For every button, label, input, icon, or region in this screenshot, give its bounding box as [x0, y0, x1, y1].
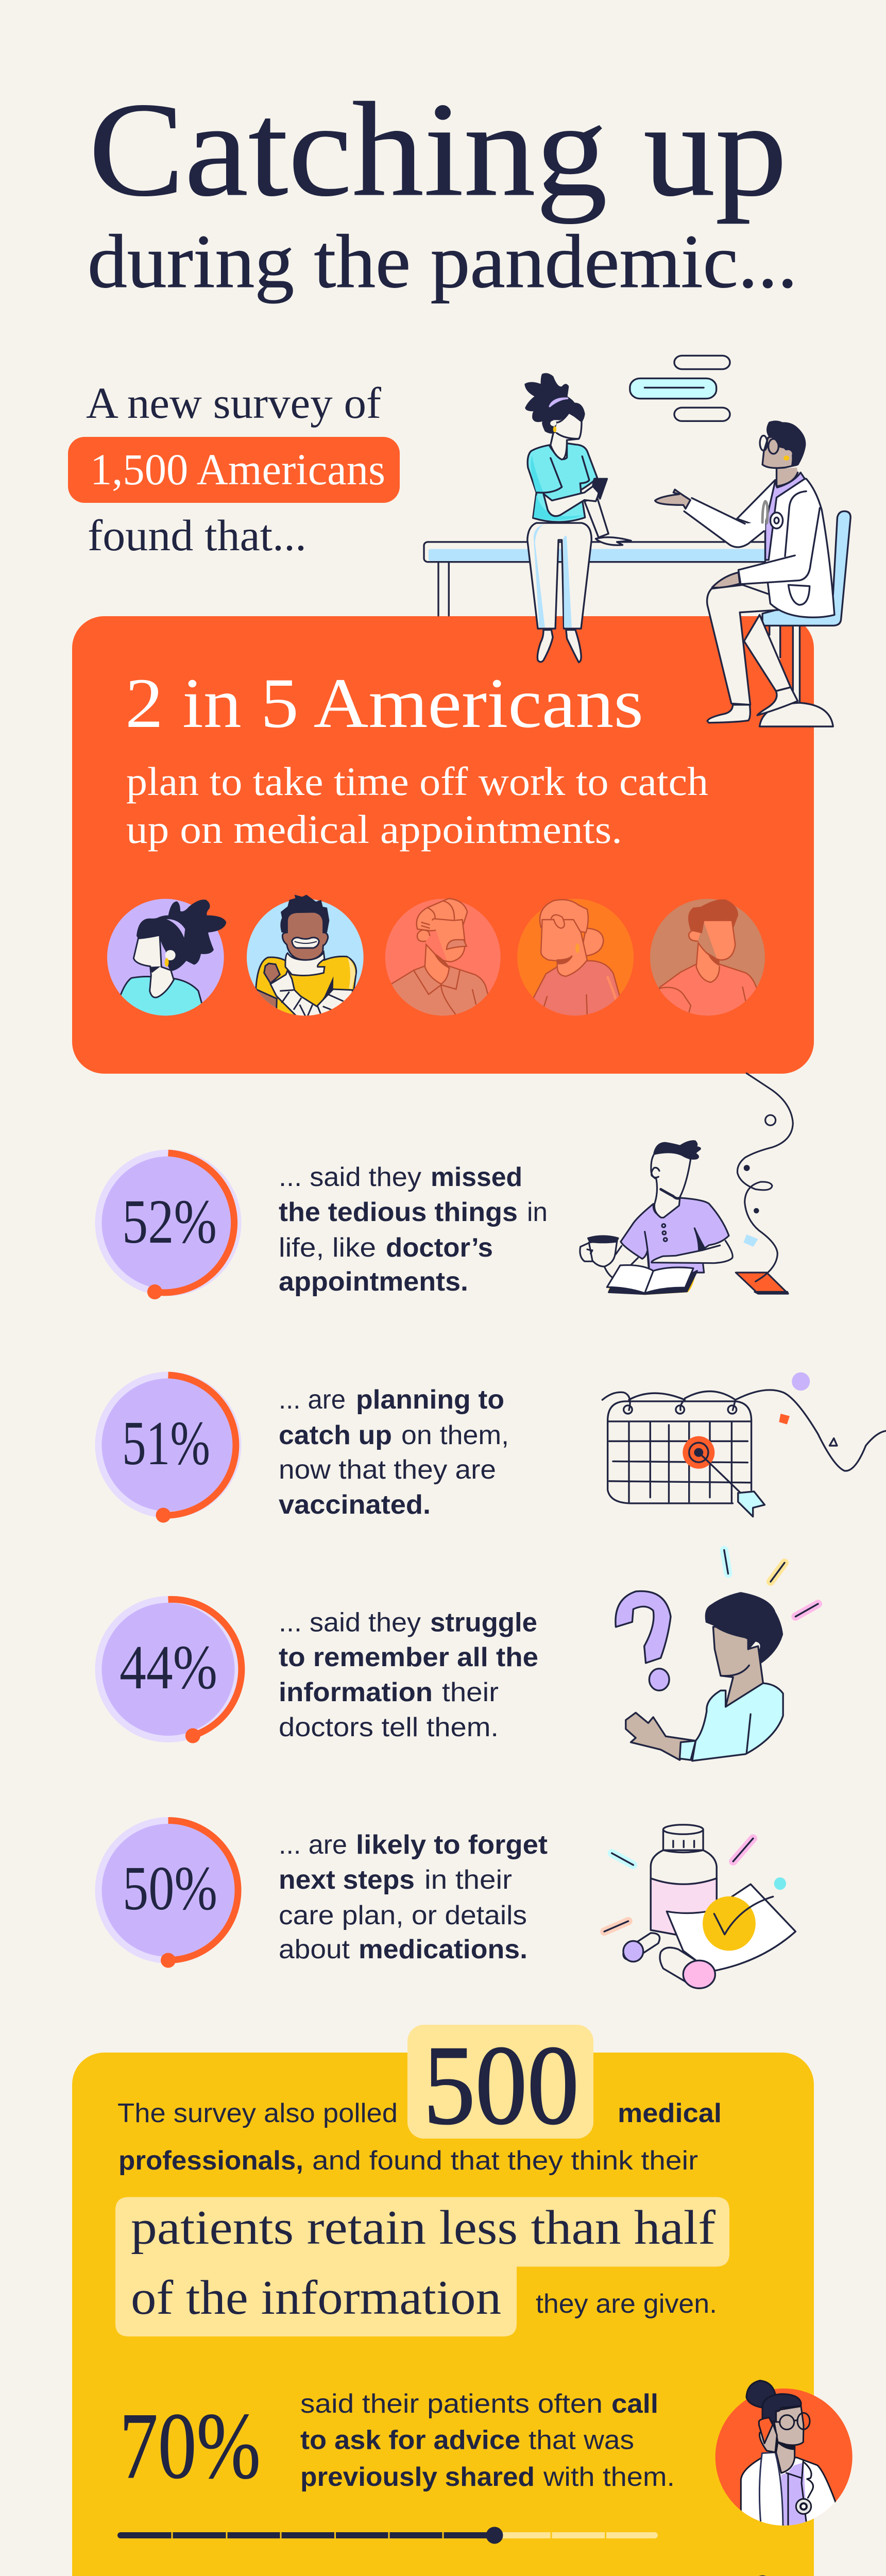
- floating dots: [743, 1115, 776, 1247]
- highlighted pill: 1,500 Americans: 1,500 Americans: [90, 445, 385, 494]
- intro text: [117, 2098, 722, 2319]
- doctor head: [760, 421, 805, 486]
- illustration: man reading with coffee and squiggle line: [580, 1073, 793, 1295]
- panel text: up on medical appointments.: [126, 807, 622, 852]
- doctor lower arm: [712, 508, 820, 588]
- description: missed: [431, 1162, 522, 1192]
- title: Catching up: [89, 75, 787, 224]
- title: [88, 75, 797, 304]
- portrait: injured man with neck brace: [247, 895, 364, 1024]
- donut: 50%: [123, 1854, 217, 1923]
- portrait: doctor on phone: [715, 2381, 853, 2531]
- squiggle: [738, 1073, 793, 1281]
- portrait: faded man with dark hair: [650, 899, 765, 1024]
- sparks: [724, 1550, 818, 1617]
- stat 70%: call: [611, 2389, 658, 2419]
- stat 52%: [95, 1150, 548, 1299]
- intro text: A new survey of: [86, 378, 381, 428]
- description: ... said they: [279, 1607, 421, 1637]
- highlight: 500: 500: [423, 2022, 579, 2148]
- stat 70%: 70%: [120, 2393, 261, 2498]
- doctor chair: [760, 511, 850, 726]
- patient arm and phone: [543, 479, 607, 516]
- intro text: found that...: [88, 511, 306, 560]
- stat 51%: [95, 1371, 509, 1523]
- panel: 2 in 5 Americans: [72, 616, 814, 1074]
- target: [683, 1436, 714, 1469]
- description: ... are: [279, 1830, 347, 1860]
- confetti: [779, 1372, 837, 1446]
- tablet: [736, 1273, 788, 1294]
- stethoscope: [762, 501, 783, 529]
- description: ... said they: [279, 1162, 421, 1192]
- stat 70%: said their patients often: [300, 2389, 603, 2419]
- binder loops and trailing line: [602, 1390, 886, 1471]
- description: about: [279, 1935, 350, 1964]
- patient trousers: [527, 523, 591, 663]
- intro text: medical: [618, 2098, 722, 2128]
- doctor front leg: [707, 585, 779, 723]
- highlight: patients retain less than half of the information: [115, 2197, 729, 2336]
- description: [279, 1162, 548, 1297]
- illustration: patient and doctor talking at exam table: [424, 355, 850, 726]
- donut: 52%: [122, 1187, 217, 1257]
- sparks around medication: [604, 1838, 786, 1931]
- slider 70%: [117, 2527, 658, 2544]
- description: in their: [424, 1865, 512, 1895]
- description: appointments.: [279, 1267, 468, 1297]
- description: planning to: [356, 1385, 504, 1415]
- stat 50%: [95, 1817, 548, 1968]
- highlight: patients retain less than half of the information: of the information: [131, 2271, 501, 2325]
- donut: [95, 1596, 242, 1743]
- intro text: they are given.: [536, 2289, 717, 2319]
- description: likely to forget: [356, 1830, 548, 1860]
- shirt: [621, 1198, 729, 1273]
- description: ... are: [279, 1385, 346, 1415]
- pills: [623, 1933, 715, 1988]
- donut: [95, 1150, 241, 1299]
- bottle: [651, 1825, 717, 1936]
- doctor raised arm: [655, 489, 765, 547]
- intro text: and found that they think their: [312, 2146, 698, 2176]
- arm: [652, 1241, 732, 1263]
- patient shirt: [527, 443, 597, 522]
- portrait: patient with phone: [759, 2575, 766, 2576]
- description: next steps: [279, 1865, 415, 1895]
- description: doctors tell them.: [279, 1713, 499, 1742]
- checklist paper: [667, 1884, 795, 1972]
- doctor back leg: [744, 615, 798, 715]
- head: [651, 1153, 691, 1217]
- description: the tedious things: [279, 1197, 518, 1227]
- description: in: [527, 1197, 548, 1227]
- highlighted pill: 1,500 Americans: [68, 437, 400, 503]
- illustrations: confused person and medication: [604, 1550, 818, 1988]
- exam table: [424, 542, 769, 616]
- stat 70%: with them.: [543, 2462, 675, 2492]
- description: medications.: [359, 1935, 527, 1964]
- stat 70%: previously shared: [300, 2462, 535, 2492]
- donut: [95, 1817, 241, 1968]
- doctor coat: [737, 472, 834, 617]
- question mark: [616, 1591, 671, 1690]
- intro text: [68, 378, 400, 560]
- stat 70%: [120, 2389, 675, 2498]
- speech bubbles: [630, 355, 730, 421]
- donut: [95, 1371, 241, 1523]
- description: [279, 1385, 509, 1520]
- buttons: [662, 1224, 667, 1241]
- coffee mug: [589, 1239, 617, 1266]
- person: [626, 1592, 783, 1761]
- description: struggle: [430, 1607, 537, 1637]
- panel heading: 2 in 5 Americans: [125, 664, 643, 742]
- portrait: woman with hair bun: [107, 899, 226, 1024]
- panel: medical professionals: [72, 2022, 814, 2576]
- description: vaccinated.: [279, 1490, 431, 1520]
- panel text: [126, 759, 708, 852]
- description: their: [442, 1677, 499, 1707]
- description: catch up: [279, 1420, 392, 1450]
- description: to remember all the: [279, 1642, 538, 1672]
- illustration: calendar with target and arrow: [602, 1372, 886, 1517]
- intro text: The survey also polled: [117, 2098, 398, 2128]
- panel text: plan to take time off work to catch: [126, 759, 708, 804]
- patient back arm: [585, 498, 631, 545]
- description: life, like: [279, 1233, 376, 1263]
- book: [609, 1272, 696, 1295]
- description: information: [279, 1677, 433, 1707]
- stat 44%: [95, 1596, 538, 1743]
- title: during the pandemic...: [88, 219, 797, 304]
- intro text: professionals,: [118, 2146, 303, 2176]
- description: doctor’s: [386, 1233, 493, 1263]
- description: on them,: [401, 1420, 509, 1450]
- highlight: patients retain less than half of the information: patients retain less than half: [131, 2201, 716, 2255]
- arrow: [698, 1452, 764, 1517]
- patient head: [524, 373, 585, 460]
- portrait: faded man with moustache: [385, 899, 501, 1024]
- description: care plan, or details: [279, 1901, 527, 1930]
- description: [279, 1607, 538, 1742]
- portrait: faded woman with bun: [517, 899, 634, 1024]
- stat 70%: to ask for advice: [300, 2426, 520, 2455]
- description: now that they are: [279, 1455, 496, 1485]
- donut: 44%: [120, 1633, 217, 1702]
- stat 70%: that was: [529, 2426, 634, 2455]
- description: [279, 1830, 548, 1964]
- donut: 51%: [122, 1409, 210, 1478]
